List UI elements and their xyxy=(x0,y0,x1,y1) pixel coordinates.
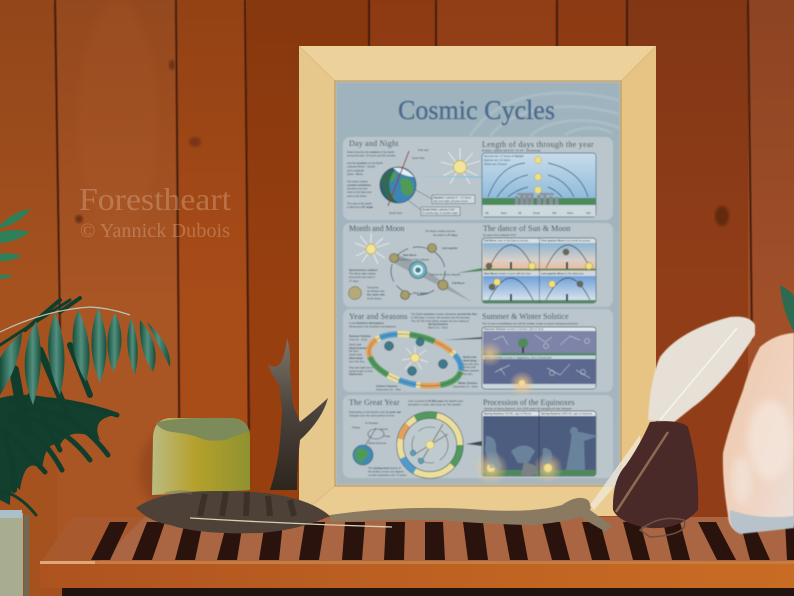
diagram: pole stars xyxy=(352,421,391,456)
text: over a period: describes a circle, also know as "the wobble". xyxy=(408,403,462,407)
main frond leaflets xyxy=(0,308,170,405)
text: solstice and equinox labels xyxy=(349,322,479,391)
diagram: pole stars: Alpha Draconis xyxy=(368,441,387,445)
text: northern hemisphere note: In the Northern Hemisphere xyxy=(349,322,384,325)
text: rotation explanation: rises in the East and xyxy=(347,190,372,194)
text: background zodiac: The background picture of xyxy=(368,467,401,470)
leather pouch xyxy=(613,421,698,537)
text: rotation explanation: therefore the Sun xyxy=(347,187,368,191)
panel: Day and Night: North Pole xyxy=(412,156,425,160)
heading: Month and Moon: Month and Moon xyxy=(349,224,405,233)
text: solstice and equinox labels: tilted towards xyxy=(349,346,367,350)
chart: sun paths over Stonehenge: Summer arc: 17 hours of daylight xyxy=(484,154,524,158)
text: solstice and equinox labels: Day and night are of xyxy=(349,365,373,369)
moon labels: Last quarter xyxy=(442,246,458,250)
chart: solstice night skies xyxy=(477,327,596,397)
text: rotation explanation: and the position on the Earth: xyxy=(347,162,383,165)
watermark: Forestheart: © Yannick Dubois xyxy=(80,220,230,242)
text: solstice and equinox labels: North pole xyxy=(349,342,362,346)
orbit xyxy=(391,247,445,295)
text: same side: of the Moon. xyxy=(367,296,382,300)
panel: The Great Year xyxy=(343,395,613,485)
candle xyxy=(152,418,250,495)
text: as seen from: As seen from Latitude N 51° xyxy=(483,233,517,237)
text: pole star: changes over the same period of time. xyxy=(349,414,395,418)
title: Cosmic Cycles xyxy=(398,95,555,125)
callout: South Pole: South Pole: Latitude S 90° xyxy=(422,208,455,212)
text: same side: Therefore xyxy=(367,286,379,290)
text: background zodiac: the Zodiac moves one degree xyxy=(368,470,404,474)
heading: Length of days: Length of days through the year xyxy=(482,140,594,149)
watermark: Forestheart xyxy=(79,181,231,242)
text: solstice and equinox labels: Autumn Equinox xyxy=(376,384,398,388)
text: rotation explanation: Latitude (North - South) xyxy=(347,165,375,169)
text: solstice and equinox labels: Equinoxes. xyxy=(349,372,364,376)
pot xyxy=(0,510,29,596)
chart: sun paths over Stonehenge: SE xyxy=(518,211,522,215)
text: moon rotation: The Moon rotates around xyxy=(425,229,456,233)
text: rotation explanation: around its axis: 23 hours and 56 minutes, xyxy=(347,154,396,158)
pointer to chart xyxy=(466,441,482,446)
white feather xyxy=(590,317,755,510)
chart: sun and moon four views: Last quarter Moon in the afternoon xyxy=(541,272,584,276)
text: zodiac note: The 12 star constellations we call the Zodiac create a cosmic background picture. xyxy=(482,322,579,326)
sun xyxy=(355,233,390,264)
icon: moon face xyxy=(348,286,362,300)
text: solstice and equinox labels: the Sun. xyxy=(463,372,473,376)
text: rotation explanation: sets in the West. xyxy=(347,194,367,198)
text: solstice and equinox labels: the Sun, xyxy=(349,349,359,353)
heading: Year and Seasons: Year and Seasons xyxy=(349,312,408,321)
text: solstice and equinox labels: Winter Solstice xyxy=(458,381,478,385)
panel: Month and Moon: New Moon xyxy=(403,253,417,257)
shadow wedges xyxy=(392,254,472,302)
light beam to Earth and chart xyxy=(414,176,482,178)
text: solstice and equinox labels: South pole xyxy=(463,365,476,369)
text: solstice and equinox labels: tilted away xyxy=(463,358,477,362)
watermark: Forestheart: Forestheart xyxy=(79,181,231,217)
text: northern hemisphere note: (Reversed in the Southern hemisphere) xyxy=(349,325,396,329)
text: revolves: The Earth revolves counter-clockwise around the Sun xyxy=(411,313,477,316)
text: revolves: in 365 days, 5 hours, 48 minutes and 46 seconds. xyxy=(411,315,471,319)
sun xyxy=(441,148,480,184)
chart: precession night skies: Spring Equinox 2060 AD, age of Aquarius xyxy=(541,412,593,416)
callout: South Pole: 6 months day, 6 months night xyxy=(422,211,458,215)
pointer to chart xyxy=(444,337,482,340)
panel: Year and Seasons xyxy=(343,309,613,397)
text: rotation explanation: The Earth rotates xyxy=(347,179,368,183)
lower dark fronds xyxy=(0,298,117,515)
text: synchronous rotation: around its own axis in xyxy=(349,275,375,279)
text: synchronous rotation: The Moon also rotates xyxy=(349,272,376,276)
heading: Procession of the Equinoxes: Procession of the Equinoxes xyxy=(483,398,575,407)
icon: Earth xyxy=(410,262,426,278)
text: solstice and equinox labels: from the Sun, xyxy=(463,362,479,366)
chart: sun and moon four views: Full Moon rises in the East at sunset xyxy=(484,238,528,242)
text: position: Position: Latitude North 51° 10′ 44″ - Stonehenge xyxy=(482,148,541,152)
frond stem xyxy=(0,307,130,332)
panel: Month and Moon: Chance for solar eclipses xyxy=(399,258,430,262)
text: rotation explanation: The axis of the Earth xyxy=(347,201,372,205)
shelf feather xyxy=(136,491,392,533)
text: solstice and equinox labels: December 21 - 22nd xyxy=(453,384,478,388)
chart: sun paths over Stonehenge: Winter arc: 8 hours xyxy=(484,162,507,166)
chart: sun paths over Stonehenge: SW xyxy=(552,211,557,215)
text: pole star: Depending on the Earth's axis the pole star xyxy=(349,411,401,414)
chart: sun paths over Stonehenge: NW xyxy=(586,211,591,215)
panel: Month and Moon: First quarter xyxy=(413,291,429,295)
icon: sun xyxy=(402,346,428,370)
callout: Equator xyxy=(408,189,475,210)
diagram: pole stars: Vega xyxy=(384,434,391,438)
text: rotation explanation: is tilted at a 23° angle xyxy=(347,206,373,209)
text: synchronous rotation: Synchronous rotation: xyxy=(349,268,378,272)
chart: solstice night skies: Winter Solstice sunrise in Sagittarius, 21st of December xyxy=(484,355,552,359)
text: solstice and equinox labels: Summer Solstice xyxy=(349,334,371,338)
icon: Earth xyxy=(353,445,373,465)
chart: sun and moon four views: First quarter Moon is at zenith at sunset xyxy=(541,238,590,242)
plant: left palm xyxy=(0,209,170,515)
chart: sun paths over Stonehenge: West xyxy=(567,211,573,215)
text: rotation explanation: counter-clockwise, xyxy=(347,183,371,187)
pole labels: Pole star xyxy=(418,148,429,152)
diagram: pole stars: Polaris xyxy=(352,426,361,430)
diagram: pole stars: Al Tarasdin xyxy=(365,421,379,425)
poster background swirl xyxy=(470,93,619,136)
branch xyxy=(330,498,612,532)
callout: South Pole xyxy=(421,207,460,216)
text: over a period: Over a period of 25 850 years the Earth's axis xyxy=(408,400,463,403)
zodiac ring xyxy=(364,325,466,395)
chart: sun paths over Stonehenge: NE xyxy=(485,211,489,215)
text: solstice and equinox labels: tilted away xyxy=(349,356,363,360)
text: rotation explanation: (East - West). xyxy=(347,172,364,176)
chart: sun and moon four views: New Moon travels in sync with the Sun xyxy=(484,272,531,276)
text: solstice and equinox labels: tilted towards xyxy=(463,369,479,373)
callout: Equator: Equator: Latitude 0° - 12 hours xyxy=(434,196,472,200)
chart: sun paths over Stonehenge: East xyxy=(501,211,507,215)
chart: sun paths over Stonehenge xyxy=(482,153,596,217)
wooden picture frame xyxy=(299,46,656,516)
chart: solstice night skies: Summer Solstice sunrise in Gemini, 21st of June xyxy=(484,327,544,331)
icon: Earth globe xyxy=(380,151,416,206)
heading: Summer and Winter Solstice: Summer & Winter Solstice xyxy=(482,312,569,321)
chart: precession night skies xyxy=(474,411,598,485)
text: same side: the same side xyxy=(367,293,385,297)
chart: sun paths over Stonehenge: Equinox arc: 12 hours xyxy=(484,158,511,162)
text: solstice and equinox labels: equal length at both xyxy=(349,369,373,373)
icon: zodiac wheel xyxy=(397,412,463,478)
upper-left fronds xyxy=(0,209,31,279)
heading: The Great Year: The Great Year xyxy=(349,398,400,407)
text: solstice and equinox labels: from the Sun. xyxy=(349,359,365,363)
text: synchronous rotation: 27 days. xyxy=(349,279,359,283)
plant: right xyxy=(780,285,794,332)
slatted wooden shelf xyxy=(40,517,794,596)
text: solstice and equinox labels: September 22 - 23rd xyxy=(376,387,401,391)
panel: Day and Night xyxy=(343,137,613,220)
chart: sun paths over Stonehenge: South xyxy=(533,211,541,215)
panel: Month and Moon: the Earth in 27 days. xyxy=(433,233,458,237)
pointer to chart xyxy=(457,268,482,273)
text: sunrise at spring equinox: Sunrise at Spring Equinox: over 2160 years the background has changed. xyxy=(484,406,572,410)
text: rotation explanation: and Longitude xyxy=(347,168,365,172)
text: solstice and equinox labels: March 21 - 22nd xyxy=(428,325,448,329)
salt lamp xyxy=(723,333,794,534)
text: solstice and equinox labels: North pole xyxy=(463,355,477,359)
text: rotation explanation: Determined by the rotation of the Earth xyxy=(347,151,394,154)
text: same side: we always see xyxy=(367,289,385,293)
heading: Day and Night: Day and Night xyxy=(349,139,399,148)
panel: Day and Night: South Pole xyxy=(389,211,403,215)
seasonal earths xyxy=(384,338,448,376)
antler xyxy=(268,338,328,490)
chart: precession night skies: Spring Equinox 100 BC, age of Pisces xyxy=(484,412,532,416)
diagram: pole stars: Deneb xyxy=(380,427,388,431)
text: solstice and equinox labels: South pole xyxy=(349,353,362,357)
panel: Month and Moon: Full Moon xyxy=(452,281,465,285)
moons xyxy=(390,244,448,300)
text: background zodiac: counter-clockwise over 72 years. xyxy=(368,473,407,477)
callout: Equator: day and night, all year round xyxy=(434,199,468,203)
text: solstice and equinox labels: Spring Equinox xyxy=(428,322,448,326)
text: solstice and equinox labels: June 21 - 22nd xyxy=(349,337,367,341)
poster: Cosmic Cycles xyxy=(336,82,620,485)
heading: The dance of Sun and Moon: The dance of Sun & Moon xyxy=(483,224,571,233)
text: revolves: The 23° tilt of the Earth creates the four seasons. xyxy=(411,319,470,323)
panel: Month and Moon xyxy=(343,223,613,307)
panel: Month and Moon: Chance for lunar eclipses xyxy=(430,272,461,276)
chart: sun and moon four views xyxy=(482,238,596,303)
